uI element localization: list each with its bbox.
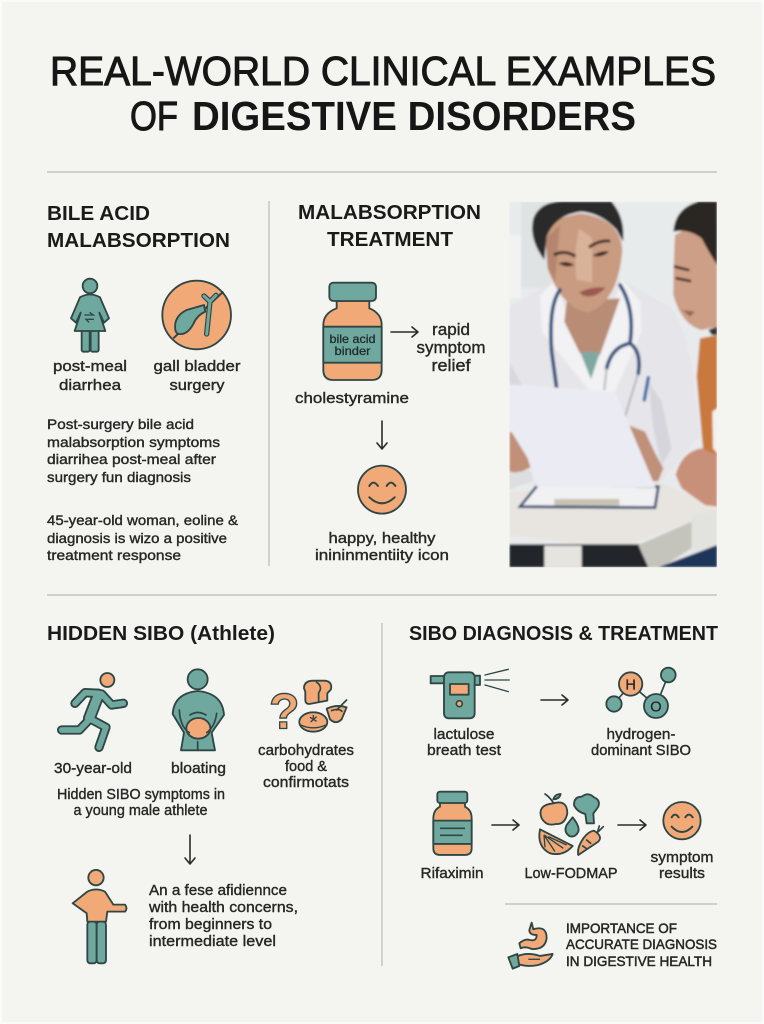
text block: audience: An a fese afidiennce: [149, 882, 287, 899]
label: hydrogen-dominant SIBO: hydrogen-: [606, 726, 676, 743]
icon: hydrogen molecule: H: [625, 677, 636, 693]
callout: importance of accurate diagnosis: [566, 920, 717, 969]
label: rapid symptom relief: rapid: [432, 320, 470, 339]
text block: symptoms: surgery fun diagnosis: [47, 469, 191, 485]
label: 30-year-old: 30-year-old: [54, 760, 132, 777]
icon: stomach in hand: [508, 923, 553, 969]
icon: bloating figure: [173, 669, 224, 750]
label: low-FODMAP: Low-FODMAP: [524, 865, 618, 882]
label: bloating: bloating: [171, 760, 226, 777]
label: carbohydrates food: confirmotats: [263, 774, 349, 791]
arrow: to relief: [391, 327, 418, 337]
text block: case summary: 45-year-old woman, eoline &: [47, 512, 239, 528]
paper: [509, 384, 656, 488]
label: happy healthy icon: happy, healthy: [328, 530, 436, 547]
heading: SIBO diagnosis and treatment: SIBO DIAGNOSIS & TREATMENT: [409, 623, 718, 645]
arrow: down to person: [185, 835, 195, 864]
arrow: breath test to result: [541, 695, 568, 705]
title: REAL-WORLD CLINICAL EXAMPLES: [50, 48, 716, 94]
heading: bile acid malabsorption: MALABSORPTION: [47, 230, 230, 252]
icon: hydrogen molecule: O: [650, 699, 662, 715]
hair: [532, 202, 623, 260]
heading: malabsorption treatment: TREATMENT: [327, 229, 453, 251]
stethoscope: [551, 285, 639, 388]
icon: bile acid binder bottle: bile acid: [330, 332, 376, 346]
icon: hydrogen molecule: [606, 668, 676, 718]
label: hydrogen-dominant SIBO: dominant SIBO: [591, 742, 691, 759]
icon: woman with abdominal discomfort: [71, 279, 109, 352]
text block: hidden symptoms: a young male athlete: [74, 802, 208, 819]
title: OF: [130, 93, 178, 139]
label: symptom results: symptom: [650, 849, 714, 866]
label: rifaximin: Rifaximin: [420, 865, 484, 882]
label: rapid symptom relief: relief: [432, 356, 471, 375]
patient: [697, 335, 717, 455]
label: rapid symptom relief: symptom: [416, 338, 486, 357]
icon: breath test device: [431, 669, 509, 718]
arrow: rifaximin to diet: [492, 820, 519, 830]
icon: runner: [62, 673, 123, 747]
icon: smiling face: [358, 466, 406, 514]
text block: symptoms: malabsorption symptoms: [47, 434, 220, 450]
icon: gall bladder surgery: [162, 281, 231, 349]
arrow: diet to results: [618, 820, 646, 830]
label: carbohydrates food: food &: [285, 758, 327, 775]
title: [50, 48, 716, 139]
label: happy healthy icon: [315, 530, 449, 564]
label: hydrogen-dominant SIBO: [591, 726, 691, 759]
label: surgery: surgery: [170, 377, 225, 394]
heading: bile acid malabsorption: BILE ACID: [47, 203, 150, 225]
callout: importance of accurate diagnosis: ACCURATE DIAGNOSIS: [566, 936, 717, 952]
text block: case summary: treatment response: [47, 547, 181, 563]
heading: malabsorption treatment: MALABSORPTION: [298, 202, 481, 224]
icon: carbohydrates and question mark: ?: [269, 683, 300, 739]
callout: importance of accurate diagnosis: IN DIGESTIVE HEALTH: [566, 953, 712, 969]
text block: audience: from beginners to: [149, 916, 272, 933]
heading: hidden SIBO: HIDDEN SIBO (Athlete): [47, 623, 275, 645]
panel: malabsorption treatment: [295, 202, 486, 564]
icon: low-FODMAP foods: [539, 794, 603, 855]
neck and shirt: [564, 298, 620, 355]
text block: case summary: diagnosis is wizo a positive: [47, 530, 227, 546]
doctor hands: [509, 431, 532, 474]
label: happy healthy icon: inininmentiity icon: [315, 547, 449, 564]
icon: bile acid binder bottle: [323, 283, 382, 380]
text block: hidden symptoms: [57, 786, 225, 819]
icon: carbohydrates and question mark: [269, 681, 347, 739]
text block: case summary: [47, 512, 239, 563]
label: gall bladder: gall bladder: [154, 358, 240, 375]
text block: symptoms: Post-surgery bile acid: [47, 416, 194, 432]
text block: symptoms: diarrihea post-meal after: [47, 451, 216, 467]
title: DIGESTIVE DISORDERS: [192, 93, 636, 139]
label: symptom results: results: [659, 865, 705, 882]
clipboard: [520, 484, 658, 508]
panel: hidden SIBO athlete: [47, 623, 354, 963]
label: lactulose breath test: lactulose: [434, 726, 494, 743]
label: symptom results: [650, 849, 714, 882]
icon: smiling face: [663, 802, 701, 839]
text block: hidden symptoms: Hidden SIBO symptoms in: [57, 786, 225, 803]
label: carbohydrates food: [258, 742, 354, 791]
panel: SIBO diagnosis and treatment: [409, 623, 718, 969]
label: carbohydrates food: carbohydrates: [258, 742, 354, 759]
label: post-meal diarrhea: post-meal: [53, 358, 127, 375]
label: diarrhea: diarrhea: [59, 377, 122, 394]
label: rapid symptom relief: [416, 320, 486, 375]
icon: standing person: [73, 870, 126, 963]
arrow: down to smile: [377, 421, 387, 449]
text block: audience: with health concerns,: [148, 899, 298, 916]
heading: malabsorption treatment: [298, 202, 481, 251]
coat: [509, 278, 699, 485]
callout: importance of accurate diagnosis: IMPORTANCE OF: [566, 920, 677, 936]
text block: audience: intermediate level: [149, 933, 276, 950]
icon: bile acid binder bottle: binder: [334, 344, 371, 358]
label: cholestyramine: cholestyramine: [295, 390, 409, 407]
text block: symptoms: [47, 416, 220, 485]
photo: doctor reviewing document with patient: [509, 202, 717, 567]
panel: bile acid malabsorption: [47, 203, 240, 563]
text block: audience: [148, 882, 298, 950]
label: lactulose breath test: breath test: [427, 742, 502, 759]
heading: bile acid malabsorption: [47, 203, 230, 252]
label: lactulose breath test: [427, 726, 502, 759]
face: [546, 213, 622, 312]
table: [509, 481, 717, 549]
icon: rifaximin bottle: [433, 792, 472, 855]
